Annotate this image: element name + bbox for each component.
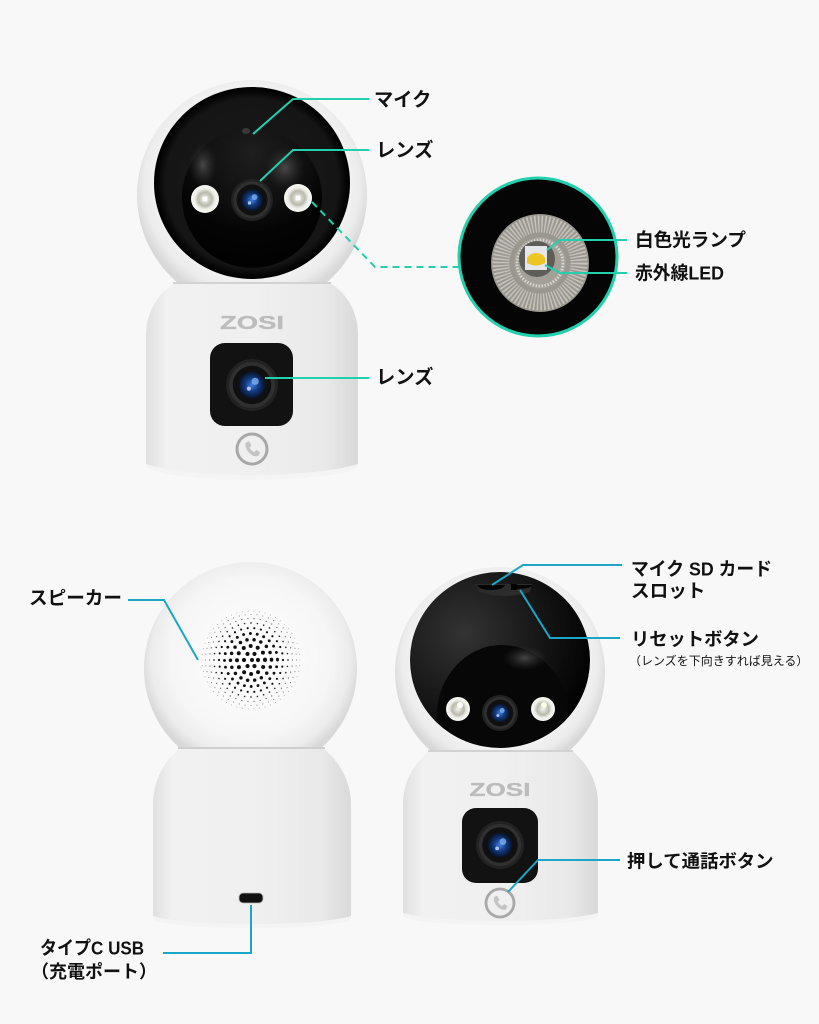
- rear camera: [144, 562, 357, 928]
- label: upper lens: レンズ: [376, 138, 433, 162]
- label: SD slot: [631, 558, 772, 602]
- label: USB: （充電ポート）: [31, 961, 157, 982]
- label: infrared LED: 赤外線LED: [635, 262, 724, 284]
- leader: SD slot: [492, 565, 622, 585]
- leader: USB: [163, 905, 251, 953]
- label: white lamp: 白色光ランプ: [635, 230, 746, 250]
- tilted base: ZOSI: [470, 780, 530, 800]
- detail circle: lamp: [459, 178, 617, 336]
- front camera: [137, 80, 367, 480]
- label: USB: [31, 938, 157, 982]
- leader: mic: [253, 99, 369, 134]
- leader: call button: [508, 860, 620, 892]
- label: reset: リセットボタン: [631, 628, 759, 650]
- USB-C port: [239, 893, 263, 903]
- leader: speaker: [128, 600, 198, 660]
- rear head with speaker: [144, 562, 357, 775]
- label: speaker: スピーカー: [29, 588, 122, 608]
- label: SD slot: スロット: [631, 580, 705, 602]
- label: lower lens: レンズ: [376, 366, 433, 388]
- note: reset: （レンズを下向きすれば見える）: [629, 653, 808, 668]
- leader: white lamp: [547, 240, 627, 250]
- camera base: ZOSI: [220, 313, 284, 333]
- label: SD slot: マイク SD カード: [631, 558, 772, 580]
- tilted camera: [395, 567, 605, 925]
- camera base: [146, 283, 358, 480]
- rear base: [153, 748, 351, 928]
- leader: infrared LED: [545, 265, 627, 273]
- leader: lamp dashed: [312, 202, 459, 267]
- label: call button: 押して通話ボタン: [627, 850, 774, 872]
- leader: upper lens: [260, 150, 369, 181]
- tilted head: [395, 567, 605, 750]
- label: USB: タイプC USB: [40, 938, 144, 958]
- label: mic: マイク: [374, 89, 431, 111]
- leader: lower lens: [265, 377, 369, 379]
- camera head: [137, 80, 367, 310]
- tilted base: [403, 751, 598, 925]
- leader: reset: [520, 590, 620, 638]
